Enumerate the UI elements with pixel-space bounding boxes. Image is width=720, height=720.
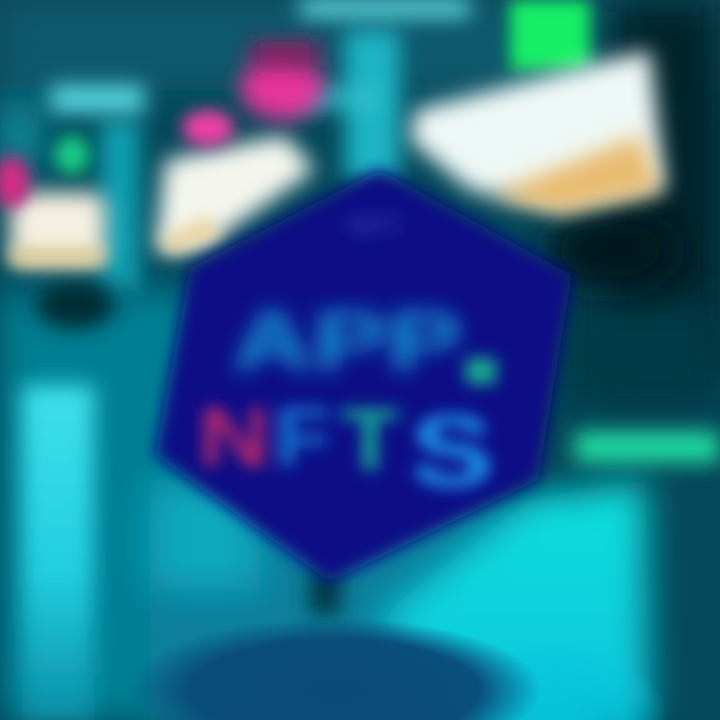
badge text: NFTS: T bbox=[340, 390, 400, 489]
badge text: NFTS: N bbox=[198, 390, 270, 484]
dark pedestal bbox=[120, 570, 550, 720]
cyan floor, lower right bbox=[375, 480, 670, 720]
shadow right of large cake bbox=[545, 210, 675, 290]
badge text: NFTS: F bbox=[274, 390, 332, 484]
shadow under left stack bbox=[35, 281, 115, 329]
badge heading: NFT bbox=[348, 210, 402, 241]
hexagon badge bbox=[155, 170, 572, 582]
green glow bar bbox=[575, 432, 720, 462]
badge text: NFTS: S bbox=[410, 394, 494, 508]
icon: medium cream block, centre left bbox=[155, 42, 324, 255]
icon: small cream block, far left bbox=[0, 135, 106, 266]
green accent bbox=[466, 358, 496, 384]
icon: large cream block, top right bbox=[410, 0, 665, 212]
badge text: NFTS bbox=[198, 390, 494, 508]
pedestal stem bbox=[310, 570, 340, 615]
badge text: first line: APP bbox=[232, 294, 462, 388]
glowing cyan columns bbox=[22, 0, 470, 720]
